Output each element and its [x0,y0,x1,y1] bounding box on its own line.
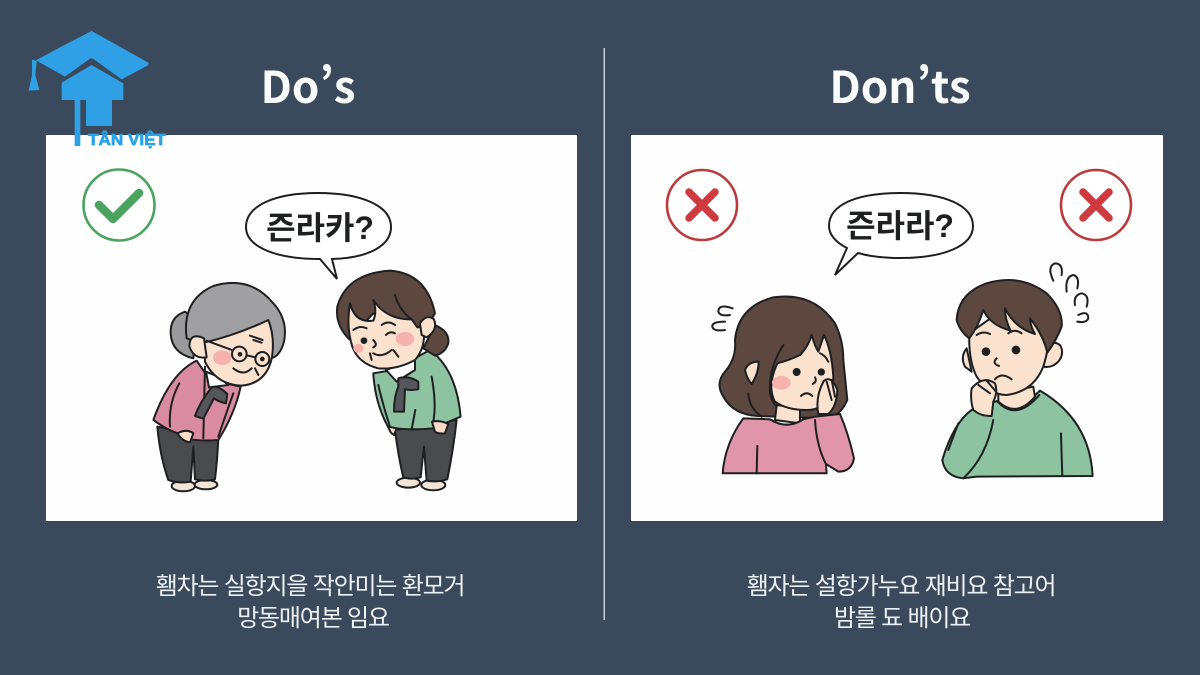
neck [775,405,800,423]
panel: do's [46,135,577,521]
left ear [963,348,972,372]
shoes [397,478,420,488]
worry marks [712,306,733,330]
character: grandmother bowing [153,283,285,491]
glasses [207,341,232,350]
hair strand [395,295,413,320]
icon: green check [84,170,154,240]
cheek [772,376,791,390]
right ear [1043,343,1062,367]
neck [998,387,1035,409]
speech bubble: don'ts: 즌라라? [846,208,954,244]
hand [817,379,837,414]
pants [157,427,218,483]
shoes [172,481,195,491]
caption: don'ts [747,573,1055,632]
hands [432,421,448,433]
ear [189,336,207,358]
hair [186,283,285,358]
speech bubble: do's: 즌라카? [266,210,374,246]
icon: red cross left [667,170,737,240]
hair [957,280,1062,353]
hand [177,431,193,442]
eyes, brows, nose, mouth [982,347,990,356]
caption: do's: 망동매여본 임요 [237,605,389,632]
logo text: TÂN VIỆT [88,130,166,149]
eyes, nose, mouth [793,368,801,376]
hair strands [748,345,783,417]
cheeks [396,332,414,346]
pants [395,420,457,481]
cheek [213,350,232,365]
ear [745,362,759,384]
collar [386,360,415,382]
logo: graduation cap with arrow [29,31,149,146]
face [204,320,273,386]
ribbon [195,387,227,419]
sweater [942,391,1093,478]
caption: don'ts: 밤롤 됴 배이요 [834,605,970,632]
jacket [373,350,461,429]
ribbon [394,377,418,412]
caption: do's [156,573,464,632]
collar [206,372,228,387]
hair [720,296,847,418]
wrinkles and mouth [233,336,263,375]
face [348,300,424,369]
caption: do's: 횀차는 실항지을 작안미는 환모거 [156,573,464,600]
caption: don'ts: 횀자는 설항가누요 재비요 참고어 [747,573,1055,600]
speech bubble: do's [246,193,391,279]
icon: red cross right [1061,170,1131,240]
jacket [153,361,241,441]
speech bubble: don'ts [829,193,973,275]
sweater [723,414,854,473]
character: woman bowing [337,271,461,490]
ear [420,317,435,337]
panel: don'ts [631,135,1163,521]
worry marks [1050,263,1088,322]
bun [423,325,448,356]
eyes and mouth [361,337,367,344]
heading: don'ts: Don’ts [829,52,971,116]
face [771,335,833,410]
divider [604,48,605,620]
hand [971,380,996,416]
hair [337,271,435,339]
face [969,300,1048,395]
heading: do's: Do’s [260,52,356,116]
bun [171,312,197,358]
character: worried boy [942,263,1093,478]
character: worried girl [712,296,854,473]
